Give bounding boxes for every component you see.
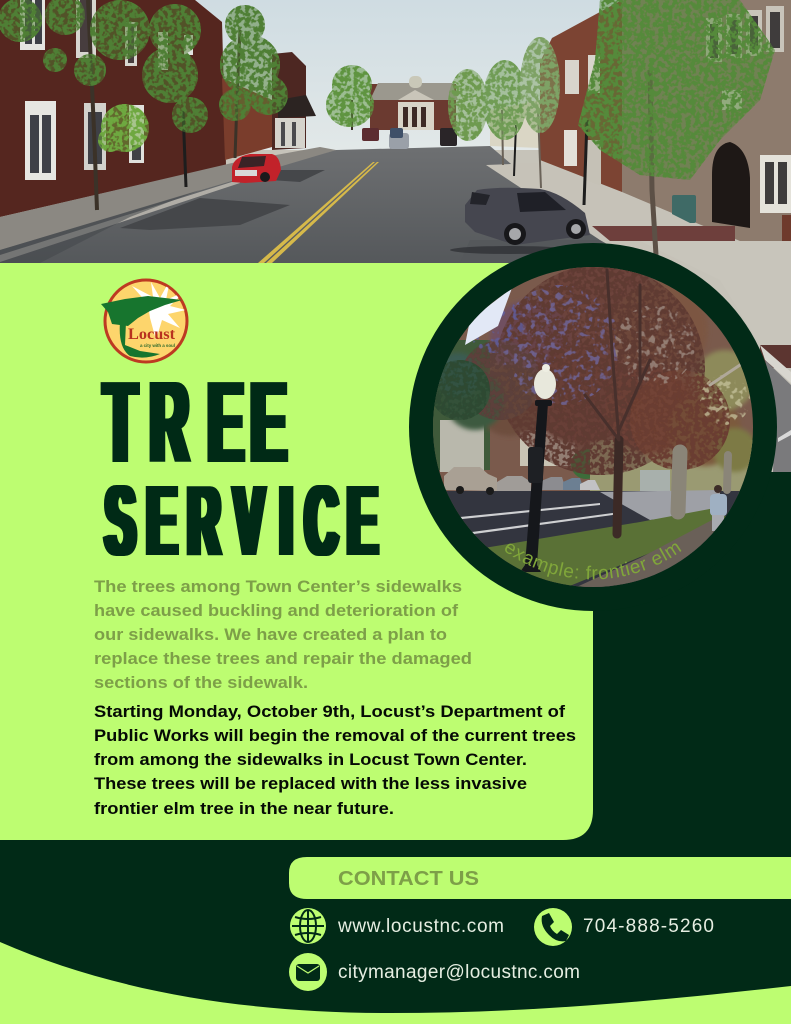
left building <box>0 0 316 217</box>
text block: removal announcement: Starting Monday, October 9th, Locust’s Department of <box>94 702 565 721</box>
email address: citymanager@locustnc.com <box>338 962 580 983</box>
circular photo: frontier elm example <box>430 258 760 591</box>
background trees and houses <box>430 340 760 495</box>
text block: background on sidewalk damage: replace these trees and repair the damaged <box>94 649 472 668</box>
road, grass and sidewalk <box>446 490 740 587</box>
logo tagline: a city with a soul <box>140 343 175 348</box>
photo: town center street <box>0 0 791 472</box>
canopy leaf texture <box>430 265 730 475</box>
dark ring behind circular photo <box>409 243 777 611</box>
icon: tree <box>101 296 182 358</box>
dark lower right block <box>540 472 791 860</box>
website: www.locustnc.com <box>337 916 504 937</box>
phone number: 704-888-5260 <box>583 916 714 937</box>
dark footer band <box>0 840 791 1013</box>
icon: envelope <box>289 953 327 991</box>
right buildings <box>490 0 791 262</box>
street trees and lamps <box>0 0 775 255</box>
text block: background on sidewalk damage <box>94 577 472 692</box>
street lamp <box>520 364 556 572</box>
title <box>104 358 377 577</box>
title: TREE <box>104 358 286 488</box>
icon: sun rays <box>132 280 186 340</box>
contact heading bar <box>289 857 791 899</box>
icon: phone <box>534 908 572 946</box>
text block: removal announcement: from among the sidewalks in Locust Town Center. <box>94 750 527 769</box>
title: SERVICE <box>105 466 377 577</box>
tree trunks and branches <box>585 270 740 534</box>
autumn canopy <box>436 258 757 472</box>
logo wordmark: Locust <box>128 326 176 343</box>
sky patch <box>465 288 512 345</box>
photo caption on curve: example: frontier elm <box>505 544 682 580</box>
text block: removal announcement: These trees will be replaced with the less invasive <box>94 774 527 793</box>
text block: removal announcement: frontier elm tree in the near future. <box>94 799 394 818</box>
text block: background on sidewalk damage: The trees among Town Center’s sidewalks <box>94 577 462 596</box>
text block: background on sidewalk damage: sections of the sidewalk. <box>94 673 308 692</box>
text block: removal announcement: Public Works will begin the removal of the current trees <box>94 726 576 745</box>
contact heading bar: CONTACT US <box>338 868 479 890</box>
canopy sky gaps <box>467 285 750 425</box>
pedestrian <box>710 485 727 531</box>
icon: globe <box>290 908 326 944</box>
sidewalks and road <box>0 146 791 472</box>
light green text panel <box>0 263 593 840</box>
parked cars <box>444 467 600 495</box>
logo: City of Locust <box>101 280 187 362</box>
text block: background on sidewalk damage: our sidewalks. We have created a plan to <box>94 625 447 644</box>
text block: background on sidewalk damage: have caused buckling and deterioration of <box>94 601 458 620</box>
text block: removal announcement <box>94 702 576 818</box>
cars <box>232 128 590 254</box>
distant building <box>370 76 458 130</box>
sky <box>190 0 630 150</box>
